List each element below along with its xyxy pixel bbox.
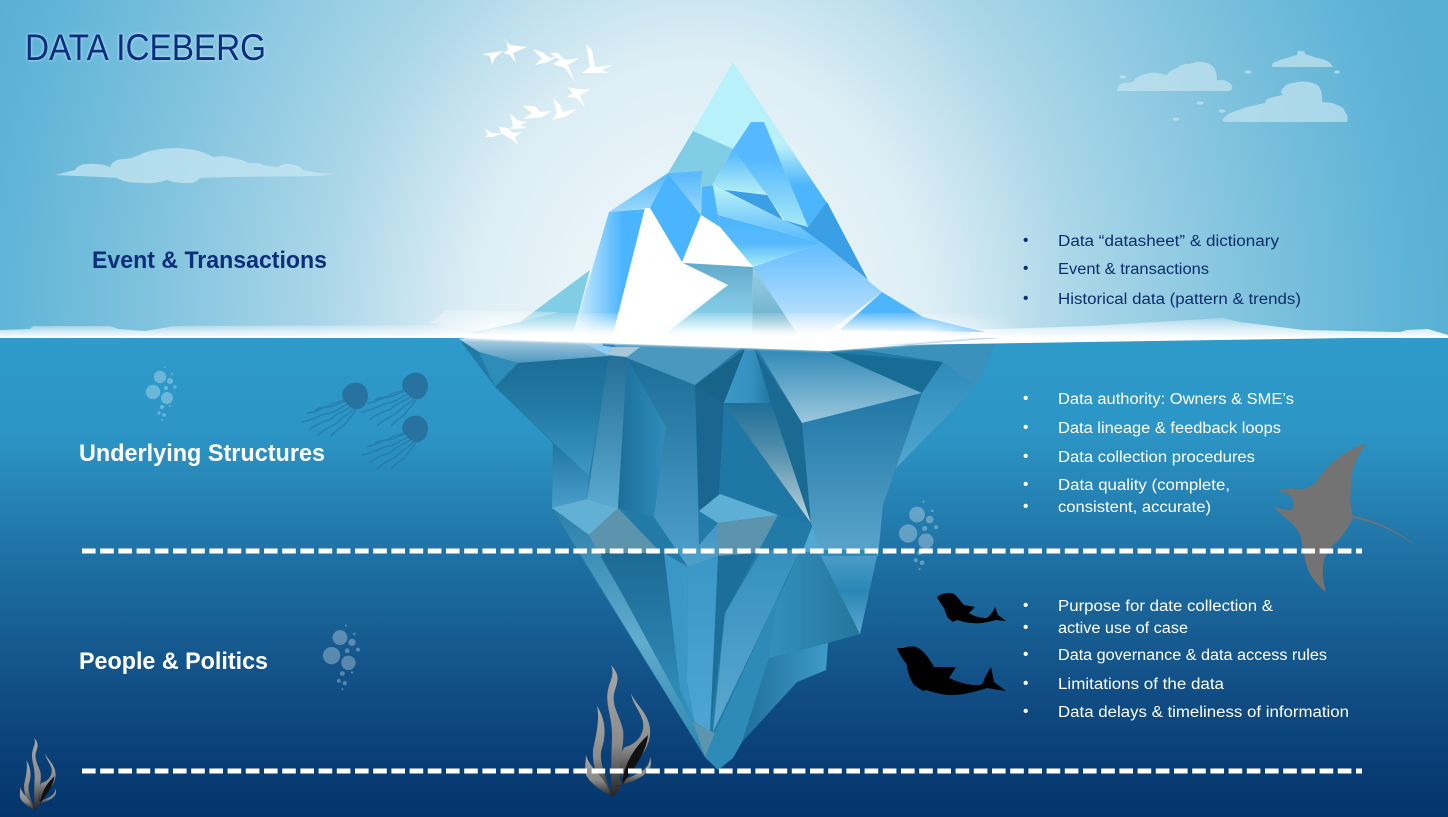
iceberg: underwater part: [459, 338, 998, 770]
dashed divider upper: [82, 548, 1362, 554]
text block: underlying structures list: Data quality (complete,: [1058, 477, 1230, 494]
top right clouds: [1117, 51, 1348, 122]
text block: underlying structures list: Data collection procedures: [1058, 449, 1255, 466]
lower underwater facets: [552, 508, 878, 770]
text block: event and transactions list: Event & transactions: [1058, 261, 1209, 278]
text block: underlying structures list: •: [1023, 498, 1028, 515]
dashed divider lower: [82, 768, 1362, 774]
text block: underlying structures list: •: [1023, 390, 1028, 407]
icon: jellyfish group: [301, 373, 428, 469]
heading: Underlying Structures: Underlying Structures: [79, 440, 325, 467]
text block: people and politics list: •: [1023, 703, 1028, 720]
text block: underlying structures list: •: [1023, 448, 1028, 465]
text block: people and politics list: Purpose for date collection &: [1058, 598, 1274, 615]
icon: small seaweed: [20, 738, 56, 810]
text block: people and politics list: active use of case: [1058, 620, 1188, 637]
title: DATA ICEBERG: [25, 27, 266, 68]
text block: people and politics list: Limitations of the data: [1058, 676, 1224, 693]
text block: underlying structures list: Data lineage & feedback loops: [1058, 420, 1281, 437]
icon: bubbles right: [899, 501, 938, 570]
text block: people and politics list: •: [1023, 597, 1028, 614]
icon: bubbles left top: [146, 366, 177, 421]
text block: underlying structures list: •: [1023, 419, 1028, 436]
icon: large seaweed: [585, 665, 651, 797]
text block: underlying structures list: •: [1023, 476, 1028, 493]
sea background: [0, 338, 1448, 817]
text block: people and politics list: Data delays & timeliness of information: [1058, 704, 1349, 721]
title: DATA ICEBERG: [25, 27, 266, 68]
icon: bubbles left bottom: [323, 625, 360, 690]
text block: people and politics list: •: [1023, 646, 1028, 663]
heading: Event & Transactions: Event & Transactions: [92, 247, 327, 274]
icon: flock of birds: [482, 37, 613, 145]
left cloud: [55, 148, 333, 183]
text block: event and transactions list: •: [1023, 290, 1028, 307]
sky background: [0, 0, 1448, 338]
icon: small dolphin: [937, 593, 1006, 623]
text block: people and politics list: Data governance & data access rules: [1058, 647, 1327, 664]
text block: event and transactions list: •: [1023, 260, 1028, 277]
text block: event and transactions list: Data “datasheet” & dictionary: [1058, 233, 1279, 250]
text block: underlying structures list: Data authority: Owners & SME’s: [1058, 391, 1294, 408]
heading: People & Politics: People & Politics: [79, 648, 268, 675]
iceberg: above water part: [470, 62, 985, 338]
text block: event and transactions list: •: [1023, 232, 1028, 249]
fog at waterline: [0, 310, 1448, 351]
text block: underlying structures list: consistent, accurate): [1058, 499, 1211, 516]
icon: manta ray: [1273, 443, 1418, 592]
text block: event and transactions list: Historical data (pattern & trends): [1058, 291, 1301, 308]
text block: event and transactions list: [1023, 232, 1301, 308]
text block: underlying structures list: [1023, 390, 1294, 516]
text block: people and politics list: [1023, 597, 1349, 721]
snowy horizon: [0, 318, 1448, 338]
upper underwater facets: [459, 338, 998, 770]
icon: large dolphin: [897, 646, 1006, 695]
text block: people and politics list: •: [1023, 675, 1028, 692]
text block: people and politics list: •: [1023, 619, 1028, 636]
